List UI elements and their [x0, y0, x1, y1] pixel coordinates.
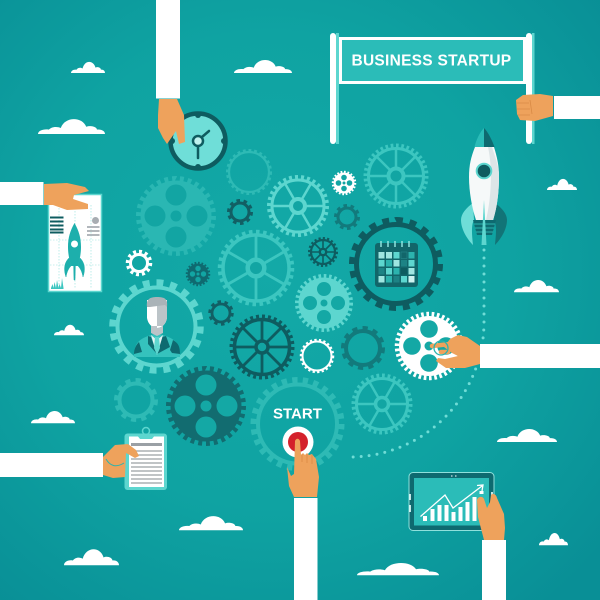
gear: start — [254, 380, 342, 468]
clipboard — [124, 428, 167, 490]
banner title: BUSINESS STARTUP — [352, 52, 511, 70]
sleeve — [482, 540, 506, 600]
sleeve — [156, 0, 180, 98]
bar chart — [423, 491, 484, 521]
hand — [287, 439, 319, 497]
mini rocket — [68, 223, 81, 266]
gear: dark with holes — [168, 368, 244, 444]
gear: person — [112, 282, 200, 370]
hand: right turning white gear — [432, 335, 600, 368]
gear: small dark ring — [229, 201, 251, 223]
gear: small white with holes — [333, 172, 355, 194]
gear: dark spokes — [232, 316, 292, 378]
rocket — [461, 128, 507, 245]
gear: dark teal ring — [344, 328, 382, 368]
clouds — [31, 60, 577, 575]
sleeve — [554, 96, 600, 119]
sleeve — [0, 453, 103, 477]
engine — [473, 220, 496, 235]
nose — [474, 128, 484, 147]
gear: teal spokes — [354, 376, 410, 432]
hand: left holding document — [0, 182, 102, 292]
start label: START — [273, 406, 322, 422]
hand: tablet with chart — [409, 472, 506, 600]
fins — [461, 203, 474, 245]
hand: bottom pressing start — [287, 439, 319, 600]
gear: light ring bottom left — [116, 380, 156, 420]
tablet — [409, 472, 494, 530]
dotted flight path — [350, 250, 484, 457]
gear: thin top ring — [228, 150, 270, 194]
banner poles — [330, 33, 532, 144]
gear: calendar — [353, 221, 439, 307]
hand: left holding clipboard — [0, 428, 167, 490]
gear: small dark ring lower — [210, 302, 232, 324]
document — [48, 194, 102, 292]
fist — [516, 94, 553, 121]
start button — [282, 426, 314, 458]
hand: right holding banner pole — [516, 94, 600, 121]
gear cluster — [112, 146, 461, 468]
gear: small white ring — [128, 252, 150, 274]
sleeve — [294, 498, 318, 600]
sleeve — [0, 182, 44, 205]
gear: top right spokes — [366, 146, 426, 206]
gear: big spokes — [220, 232, 292, 304]
hand — [158, 99, 185, 144]
gear: small teal ring — [336, 206, 358, 228]
icon: calendar — [375, 241, 418, 287]
gear: spokes light — [269, 177, 327, 235]
hand — [436, 335, 480, 368]
hand — [103, 444, 139, 478]
gear: small dark with holes — [187, 263, 209, 285]
hand: top holding clock gear — [156, 0, 227, 170]
banner panel — [340, 38, 524, 82]
hand — [477, 494, 505, 540]
gear: white with holes — [397, 314, 461, 378]
window — [477, 164, 491, 178]
center fin — [482, 200, 486, 245]
banner — [330, 33, 534, 144]
hand — [44, 183, 89, 210]
gear: small dark spokes — [310, 238, 336, 266]
gear: large light with holes — [138, 178, 214, 254]
gear: thin white ring — [301, 340, 333, 372]
sleeve — [480, 344, 600, 368]
trend arrow — [420, 485, 483, 516]
gear: light with holes — [297, 276, 351, 330]
body — [469, 147, 499, 220]
clock gear — [169, 112, 227, 170]
icon: person — [134, 297, 180, 357]
